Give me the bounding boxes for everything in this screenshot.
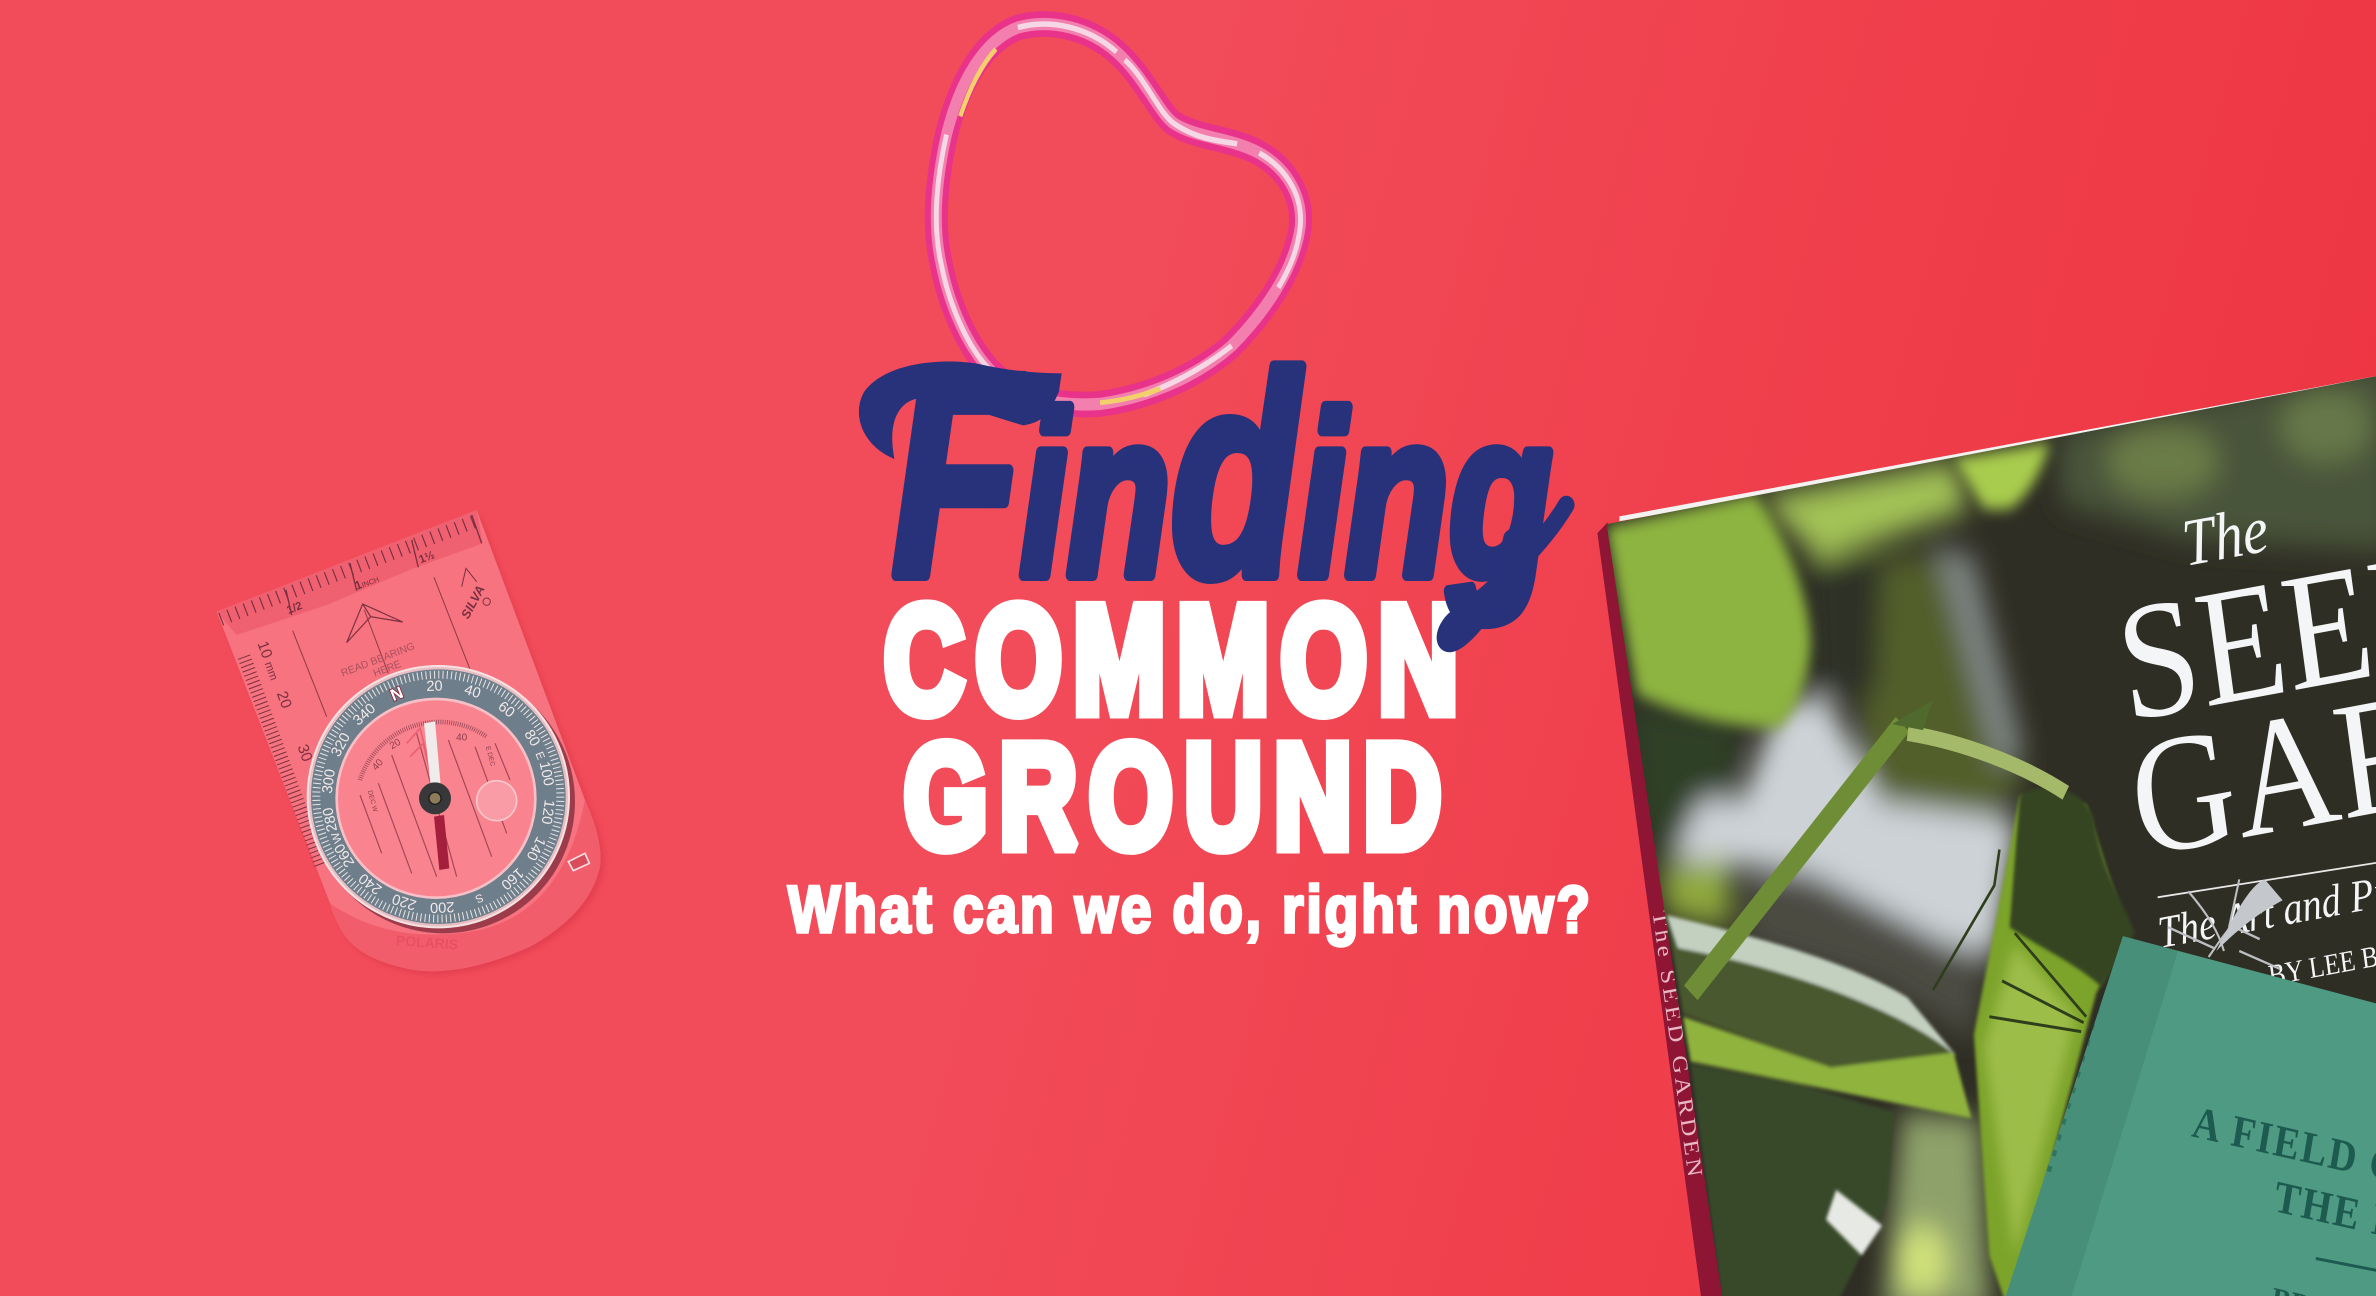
heart highlight <box>936 24 1301 395</box>
ruler labels: 1/2 <box>285 600 304 617</box>
degree numbers: 20 <box>426 678 443 695</box>
heading line: common: COMMON <box>884 576 1470 745</box>
compass face <box>337 699 535 898</box>
plate guide lines <box>293 577 470 717</box>
degree numbers: W <box>330 830 345 845</box>
millimetre labels <box>254 639 315 764</box>
heading: common ground <box>884 576 1470 879</box>
face labels <box>366 733 496 814</box>
page edge <box>1619 373 2376 521</box>
degree numbers: 280 <box>320 806 341 833</box>
degree numbers: 40 <box>462 682 483 702</box>
finding word: Finding <box>892 315 1552 637</box>
declination arc <box>360 722 487 780</box>
heart inner band <box>936 24 1301 404</box>
bezel shadow <box>312 670 575 933</box>
read bearing label: HERE <box>372 659 403 680</box>
spine ornament <box>2045 1008 2096 1178</box>
degree numbers: S <box>473 891 485 905</box>
gray degree ring <box>311 669 566 924</box>
degree numbers: 60 <box>495 699 517 721</box>
heart outer band <box>936 24 1301 404</box>
heading: finding <box>859 315 1566 643</box>
pod shadow <box>2010 787 2135 987</box>
millimetre scale <box>244 657 322 867</box>
degree numbers: 260 <box>332 840 358 870</box>
pivot <box>419 782 451 814</box>
face lines <box>360 733 510 877</box>
silva logo: SILVA <box>459 583 488 621</box>
read bearing label: READ BEARING <box>340 641 417 679</box>
upper leaves <box>1607 442 2050 727</box>
book title <box>2125 512 2376 982</box>
sharper leaves <box>1667 915 1971 1296</box>
blurred foliage <box>1627 360 2376 1296</box>
clear base <box>330 800 601 971</box>
inch ruler ticks <box>221 515 482 619</box>
guide rule <box>2316 1258 2376 1273</box>
degree numbers: 80 <box>521 727 543 750</box>
stem <box>1691 724 1903 993</box>
millimetre labels: 30 <box>294 742 315 764</box>
title rule <box>2158 860 2376 897</box>
baseplate <box>217 510 601 971</box>
subtitle: What can we do, right now? <box>788 872 1593 946</box>
polaris mark: POLARIS <box>395 932 459 952</box>
degree numbers: 240 <box>356 870 385 897</box>
degree numbers: 100 <box>536 760 556 787</box>
degree numbers: 220 <box>390 890 418 913</box>
book cover <box>1576 360 2376 1296</box>
cover base <box>1576 360 2376 1296</box>
face labels: 20 <box>388 737 403 752</box>
highlight patch <box>1826 1190 1882 1256</box>
degree numbers <box>320 678 557 915</box>
heart iridescent glint <box>960 49 1160 403</box>
degree numbers: 140 <box>523 834 548 863</box>
stem tip <box>1892 700 1933 730</box>
g tail swash <box>1445 505 1566 643</box>
letter swashes <box>859 362 1566 643</box>
bezel rim <box>308 666 569 927</box>
degree numbers: 200 <box>430 898 455 915</box>
red orienting arrow <box>407 728 430 773</box>
white needle <box>424 721 441 786</box>
degree numbers: 320 <box>328 730 354 760</box>
degree ticks <box>316 675 560 919</box>
silva logo <box>459 568 490 621</box>
F top swash <box>859 362 1062 459</box>
degree numbers: E <box>532 750 547 762</box>
bearing arrow <box>347 604 403 643</box>
ruler labels: 1½ <box>417 549 436 566</box>
red needle <box>434 815 449 870</box>
spine hinge <box>1999 936 2178 1296</box>
pod lit centre <box>1984 945 2076 1256</box>
degree numbers: 120 <box>538 799 557 825</box>
book title: The <box>2178 493 2272 581</box>
degree numbers: 160 <box>497 864 526 893</box>
tendrils <box>1933 850 2086 1032</box>
face labels: DEC W <box>366 790 379 814</box>
compass shadow <box>222 515 604 975</box>
ruler band <box>217 510 483 635</box>
millimetre labels: 10 mm <box>254 639 283 682</box>
cloth cover <box>1984 921 2376 1296</box>
photo: compass <box>217 510 604 975</box>
book spine <box>1597 522 1729 1296</box>
pivot centre <box>429 792 441 804</box>
magnifier bubble <box>477 781 517 821</box>
guide title <box>2189 1097 2376 1296</box>
photo: heart bracelet <box>936 24 1301 404</box>
face labels: E DEC <box>484 746 496 767</box>
degree numbers: 340 <box>350 701 379 729</box>
heading line: ground: GROUND <box>904 716 1453 879</box>
spine title: The SEED GARDEN <box>1647 909 1707 1182</box>
green field guide <box>1984 921 2376 1296</box>
curved stem <box>1908 733 2066 793</box>
photo: books <box>1576 360 2376 1296</box>
north marker: N <box>388 683 406 705</box>
pod leaf <box>1974 796 2127 1296</box>
face labels: 40 <box>456 733 468 744</box>
ruler labels <box>285 549 436 617</box>
lanyard hole <box>568 853 589 871</box>
millimetre labels: 20 <box>273 689 295 711</box>
degree numbers: 300 <box>320 768 339 795</box>
face labels: 40 <box>370 757 386 773</box>
feather <box>2168 879 2283 969</box>
ruler labels: 1INCH <box>353 571 381 593</box>
